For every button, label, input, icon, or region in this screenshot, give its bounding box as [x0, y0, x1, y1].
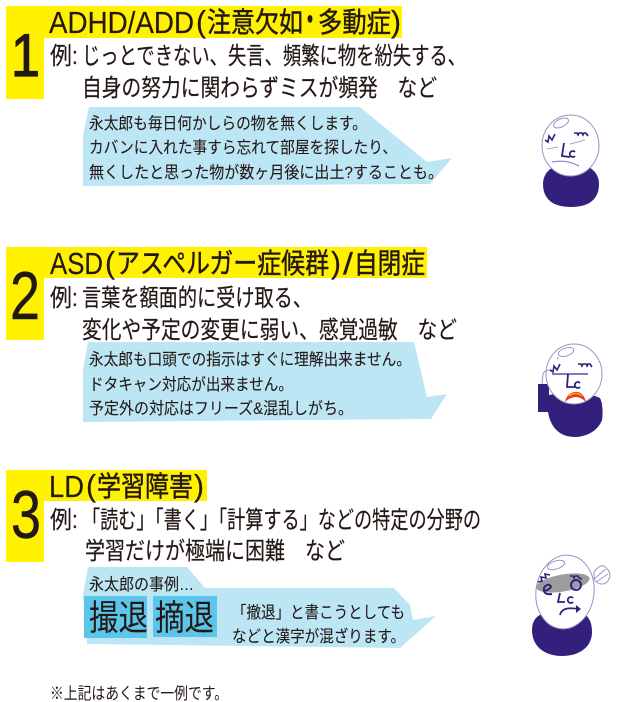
- yellow number and title band: [6, 6, 402, 99]
- speech bubble: [83, 107, 452, 186]
- speech bubble: ドタキャン対応が出来ません。: [89, 375, 293, 394]
- example text: じっとできない、失言、頻繁に物を紛失する、: [82, 43, 466, 70]
- misspelled kanji example 2: 摘退: [155, 599, 214, 638]
- speech bubble: などと漢字が混ざります。: [232, 626, 405, 646]
- example text: 自身の努力に関わらずミスが頻発 など: [82, 75, 437, 102]
- section 3: LD: [6, 468, 610, 656]
- character: frozen face: [538, 344, 603, 437]
- section 2: ASD: [6, 245, 603, 437]
- heading: ・: [299, 2, 321, 40]
- example text: 例:: [50, 507, 78, 534]
- heading: [49, 468, 204, 504]
- example text: [50, 285, 457, 344]
- example text: 例:: [50, 285, 78, 312]
- speech bubble: [83, 567, 436, 648]
- heading: [50, 245, 425, 281]
- heading: (: [105, 245, 116, 280]
- example text: 変化や予定の変更に弱い、感覚過敏 など: [82, 317, 457, 344]
- speech bubble: 無くしたと思った物が数ヶ月後に出土?することも。: [89, 163, 443, 182]
- heading: アスペルガー症候群: [116, 248, 329, 279]
- heading: 自閉症: [354, 248, 425, 279]
- character: forgetful face: [542, 115, 599, 207]
- yellow number and title band: [6, 470, 207, 562]
- speech bubble: 予定外の対応はフリーズ&混乱しがち。: [89, 399, 353, 418]
- speech bubble: カバンに入れた事すら忘れて部屋を探したり、: [89, 138, 397, 157]
- heading: 注意欠如: [207, 7, 303, 38]
- character: confused face: [531, 551, 610, 656]
- example text: 「読む」「書く」「計算する」などの特定の分野の: [82, 507, 481, 534]
- heading: LD: [49, 469, 84, 504]
- heading: (: [196, 4, 207, 39]
- heading: /: [343, 246, 353, 281]
- heading: 多動症: [318, 7, 391, 38]
- yellow number and title band: [6, 247, 427, 340]
- heading: ADHD/ADD: [49, 5, 194, 40]
- number 1: 1: [11, 22, 40, 89]
- number 2: 2: [10, 258, 40, 334]
- misspelled kanji example 1: 撮退: [89, 599, 148, 638]
- speech bubble: 永太郎の事例…: [89, 575, 194, 594]
- section 1: ADHD: [6, 2, 599, 207]
- example text: 学習だけが極端に困難 など: [85, 538, 345, 565]
- heading: ): [194, 468, 204, 503]
- example text: 言葉を額面的に受け取る、: [82, 285, 312, 312]
- heading: (: [86, 468, 97, 503]
- heading: ): [331, 245, 341, 280]
- speech bubble: [83, 342, 447, 422]
- heading: [49, 2, 401, 40]
- speech bubble: 永太郎も口頭での指示はすぐに理解出来ません。: [89, 350, 411, 369]
- example text: [50, 507, 481, 565]
- speech bubble: 永太郎も毎日何かしらの物を無くします。: [89, 114, 367, 133]
- number 3: 3: [11, 477, 41, 553]
- example text: 例:: [50, 43, 78, 70]
- heading: 学習障害: [97, 471, 193, 502]
- heading: ASD: [50, 246, 103, 281]
- example text: [50, 43, 466, 102]
- speech bubble: 「撤退」と書こうとしても: [232, 603, 405, 622]
- heading: ): [391, 4, 401, 39]
